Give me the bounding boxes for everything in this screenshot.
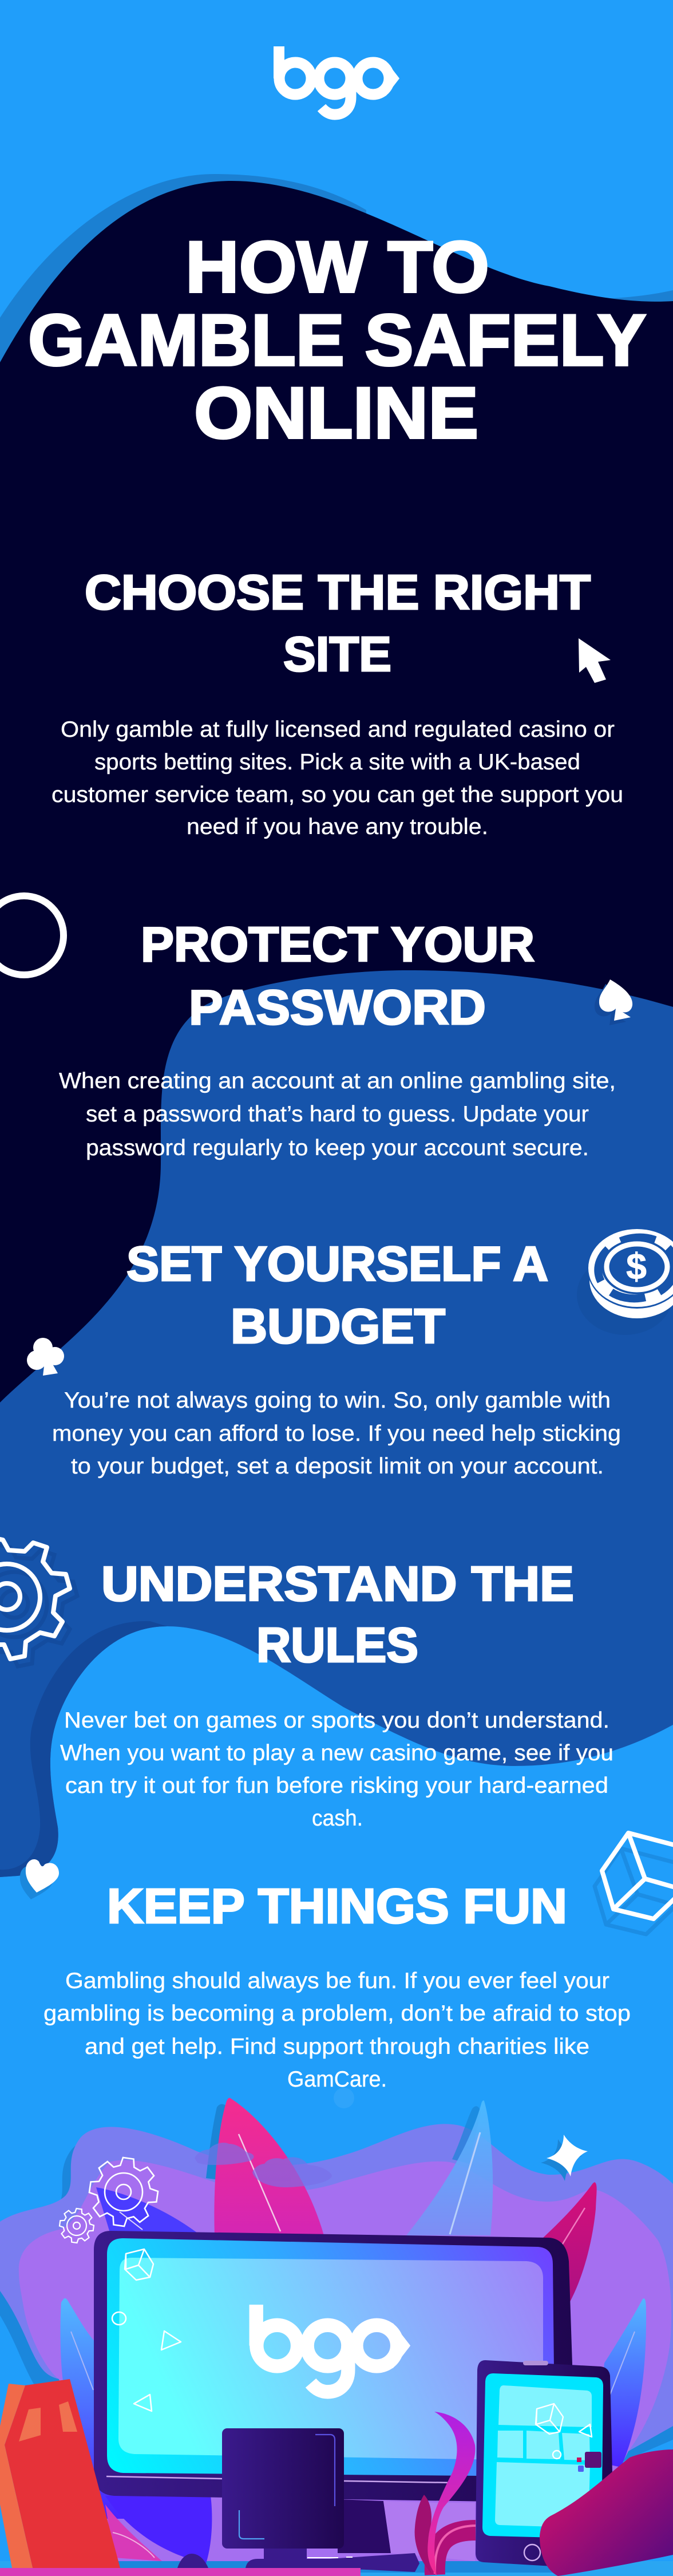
heading: SITE <box>283 627 391 682</box>
icon: cursor arrow <box>579 638 611 683</box>
body text: to your budget, set a deposit limit on your account. <box>71 1454 604 1479</box>
body text: Gambling should always be fun. If you ever feel your <box>65 1969 609 1993</box>
plant: stripe stem <box>435 2530 476 2575</box>
glow dot <box>334 2088 354 2108</box>
pc tower <box>222 2428 344 2549</box>
sparkle <box>541 2135 588 2181</box>
icon: club <box>27 1338 64 1376</box>
monitor inner screen <box>118 2258 543 2460</box>
floor strip <box>0 2561 673 2576</box>
body text: Never bet on games or sports you don’t understand. <box>64 1708 609 1733</box>
magenta leaf vein <box>560 2208 585 2249</box>
section: keep things fun <box>43 1879 631 2092</box>
indigo leaf vein <box>120 2212 142 2230</box>
body text: gambling is becoming a problem, don’t be afraid to stop <box>43 2001 631 2026</box>
title <box>28 226 646 453</box>
pink base strip <box>0 2568 361 2576</box>
magenta leaf <box>543 2182 597 2313</box>
heading: UNDERSTAND THE <box>101 1557 574 1611</box>
body text <box>52 717 623 839</box>
icon: ring <box>0 896 64 975</box>
body text: GamCare. <box>287 2067 387 2092</box>
heading <box>126 1237 548 1354</box>
left leaf vein <box>71 2332 93 2390</box>
icon: poker chips: $ <box>626 1246 647 1287</box>
dome <box>177 2554 208 2568</box>
left blue leaf <box>60 2298 137 2519</box>
clouds <box>195 2143 332 2187</box>
top leaf vein <box>450 2132 480 2234</box>
illustration: devices scene <box>0 2088 673 2576</box>
body text <box>59 1069 616 1160</box>
icon: heart <box>20 1859 59 1899</box>
title: ONLINE <box>194 372 478 453</box>
tower neck <box>264 2549 307 2561</box>
heading: PROTECT YOUR <box>141 918 535 972</box>
body text: money you can afford to lose. If you need help sticking <box>52 1421 621 1446</box>
magenta blob <box>540 2449 673 2576</box>
icon: small gear <box>58 2207 96 2245</box>
monitor screen <box>107 2238 555 2476</box>
heading <box>85 566 591 682</box>
plant: small leaf <box>415 2495 431 2574</box>
body text: sports betting sites. Pick a site with a UK-based <box>94 750 580 775</box>
heading <box>141 918 535 1035</box>
heading: KEEP THINGS FUN <box>107 1879 567 1934</box>
body text: password regularly to keep your account secure. <box>86 1136 589 1160</box>
red game piece <box>0 2379 120 2568</box>
stand trapezoid <box>338 2499 391 2553</box>
title: HOW TO <box>185 226 489 307</box>
title: GAMBLE SAFELY <box>28 299 646 381</box>
icon: spade <box>595 979 632 1025</box>
indigo leaf behind monitor <box>96 2187 197 2233</box>
heading: CHOOSE THE RIGHT <box>85 566 591 620</box>
monitor highlight <box>106 2476 452 2483</box>
body text: need if you have any trouble. <box>187 815 488 839</box>
lavender blob <box>0 2124 673 2561</box>
section: understand the rules <box>60 1557 613 1831</box>
icon: poker chips <box>577 1227 673 1335</box>
navy wave panel <box>0 181 673 1443</box>
pink leaf vein <box>239 2134 280 2231</box>
heading: SET YOURSELF A <box>126 1237 548 1291</box>
heading: RULES <box>256 1618 418 1673</box>
icon: cube outline <box>595 1833 673 1934</box>
monitor body <box>94 2231 572 2503</box>
lower pink leaf vein <box>113 2532 155 2558</box>
mid blue wave panel <box>0 970 673 1877</box>
body text: customer service team, so you can get the support you <box>52 783 623 807</box>
icon: big gear <box>85 2154 162 2230</box>
purple blob <box>19 2160 671 2561</box>
logo: bgo on monitor <box>256 2305 410 2392</box>
body text: cash. <box>312 1806 363 1831</box>
right leaf vein <box>610 2332 635 2395</box>
tablet <box>476 2360 612 2567</box>
leaf shadows <box>206 2104 481 2181</box>
body text: Only gamble at fully licensed and regulated casino or <box>61 717 615 742</box>
blob shadow <box>0 2135 673 2573</box>
body text <box>60 1708 613 1831</box>
section: set yourself a budget <box>52 1237 621 1479</box>
purple floor panel <box>383 2501 475 2561</box>
right blue leaf <box>595 2298 646 2467</box>
heading: PASSWORD <box>189 981 486 1035</box>
section: choose the right site <box>52 566 623 839</box>
top blue leaf <box>406 2100 493 2235</box>
lower pink leaf <box>105 2504 162 2561</box>
plant: curl leaf <box>427 2412 475 2576</box>
tower highlights <box>239 2435 335 2539</box>
body text: set a password that’s hard to guess. Update your <box>86 1102 589 1127</box>
body text <box>52 1388 621 1479</box>
section: protect your password <box>59 918 616 1160</box>
background wave shadow <box>0 174 673 401</box>
base bar <box>246 2553 419 2572</box>
heading: BUDGET <box>231 1299 445 1354</box>
logo: bgo top <box>279 46 399 114</box>
body text <box>43 1969 631 2092</box>
dark blue wave shade <box>0 1621 167 1877</box>
screen icons <box>112 2249 181 2411</box>
icon: gear left <box>0 1537 77 1666</box>
heading <box>101 1557 574 1673</box>
body text: When you want to play a new casino game, see if you <box>60 1741 613 1765</box>
lower blue leaf <box>105 2496 212 2563</box>
body text: and get help. Find support through charities like <box>85 2034 589 2059</box>
body text: You’re not always going to win. So, only gamble with <box>64 1388 611 1413</box>
base lines <box>307 2557 353 2558</box>
pink leaf <box>214 2098 324 2235</box>
body text: When creating an account at an online gambling site, <box>59 1069 616 1093</box>
body text: can try it out for fun before risking your hard-earned <box>65 1773 608 1798</box>
